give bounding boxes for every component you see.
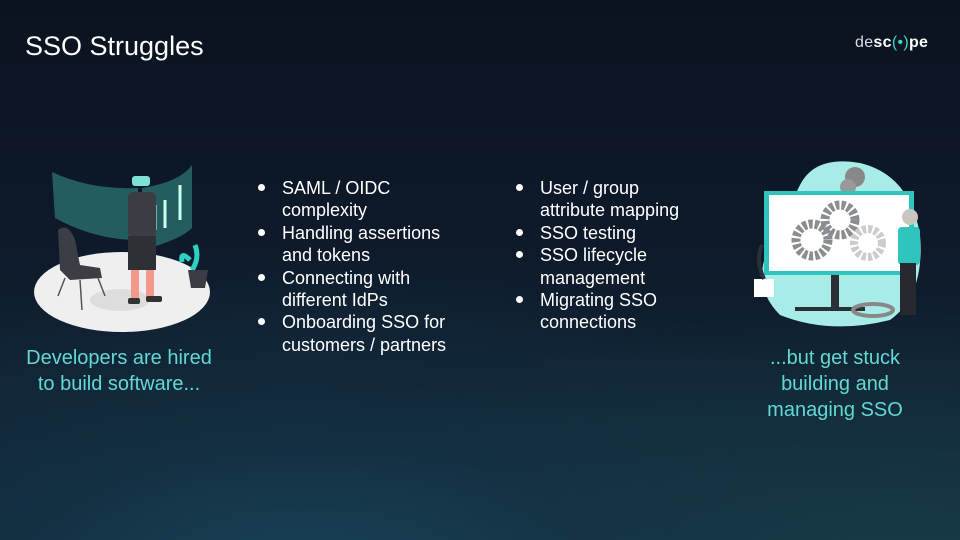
illustration: developer with VR (34, 165, 210, 332)
bullets left: and tokens (282, 245, 370, 265)
bullets left: Onboarding SSO for (282, 312, 445, 332)
bullets right (516, 178, 679, 332)
caption left: to build software... (38, 373, 200, 395)
bullets left: different IdPs (282, 290, 388, 310)
bullets right: management (540, 268, 645, 288)
bullets right: connections (540, 312, 636, 332)
bullets right: User / group (540, 178, 639, 198)
caption right (767, 347, 903, 421)
bullets left: SAML / OIDC (282, 178, 390, 198)
bullets right: Migrating SSO (540, 290, 657, 310)
caption right: ...but get stuck (770, 347, 900, 369)
bullets left: complexity (282, 200, 367, 220)
bullets left (258, 178, 446, 355)
bullets left: customers / partners (282, 335, 446, 355)
bullets left: Handling assertions (282, 223, 440, 243)
illustration: stuck with gears (754, 161, 921, 326)
bullets right: SSO lifecycle (540, 245, 647, 265)
bullets right: SSO testing (540, 223, 636, 243)
bullets left: Connecting with (282, 268, 410, 288)
caption left: Developers are hired (26, 347, 212, 369)
bullets right: attribute mapping (540, 200, 679, 220)
logo: descope: desc(•)pe (855, 34, 928, 51)
caption right: building and (781, 373, 889, 395)
caption right: managing SSO (767, 399, 903, 421)
title: SSO Struggles (25, 31, 204, 61)
caption left (26, 347, 212, 395)
